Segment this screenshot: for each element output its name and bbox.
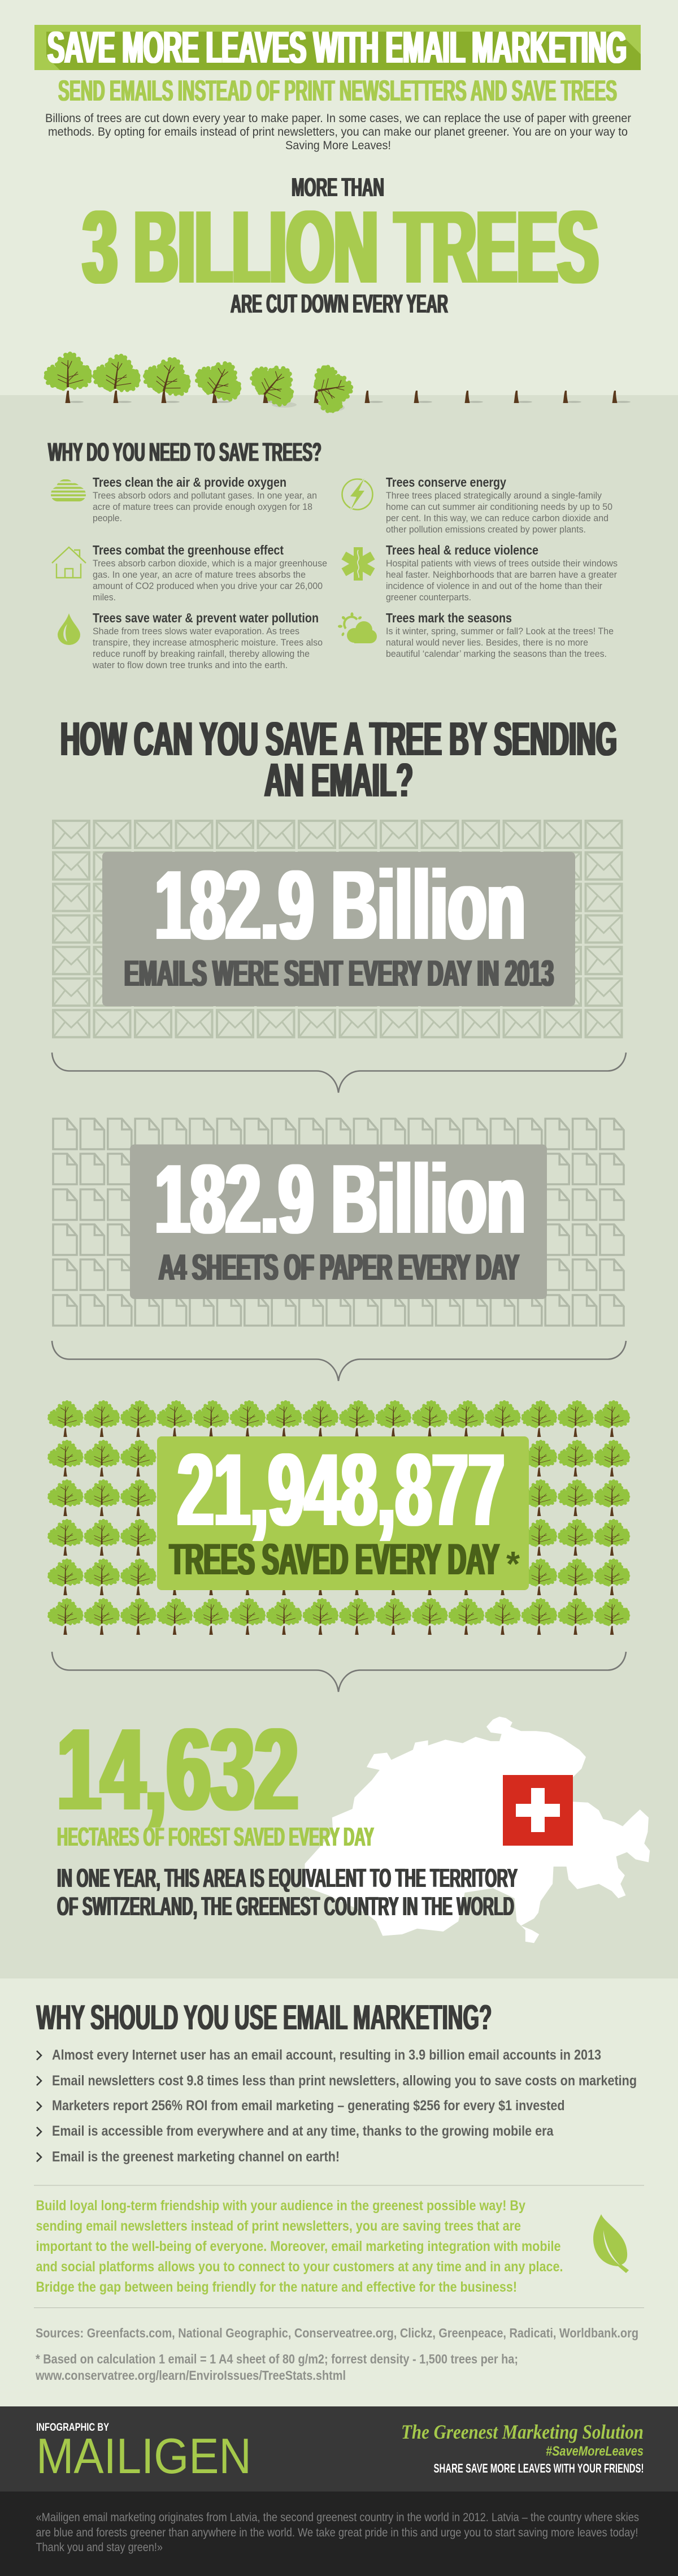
reason: heal and reduce violence: greener counterparts. xyxy=(386,592,471,603)
stat: 14,632: 14,632 xyxy=(57,1704,298,1834)
stat: more than: MORE THAN xyxy=(292,172,384,202)
heading: how can you save a tree: AN EMAIL? xyxy=(264,754,413,807)
footer: branding bar: #SaveMoreLeaves xyxy=(546,2444,644,2459)
reason: heal and reduce violence: incidence of violence in and out of the home than their xyxy=(386,581,602,591)
reason: conserve energy xyxy=(342,475,612,535)
stat: hectares of forest: HECTARES OF FOREST SAVED EVERY DAY xyxy=(57,1822,374,1851)
footer: branding bar: The Greenest Marketing Solution xyxy=(401,2421,644,2443)
reason: save water: Trees save water & prevent water pollution xyxy=(93,611,319,625)
text: green call to action: Bridge the gap between being friendly for the nature and effective for the business! xyxy=(36,2279,517,2295)
callout: emails sent every day xyxy=(102,850,575,1006)
reason: save water: water to flow down tree trunks and into the earth. xyxy=(92,660,288,670)
text: green call to action: important to the well-being of everyone. Moreover, email marketing integration with mobile xyxy=(36,2239,561,2254)
reason: greenhouse effect: gas. In one year, an acre of mature trees absorbs the xyxy=(93,570,306,580)
intro paragraph: Saving More Leaves! xyxy=(285,138,391,152)
intro paragraph xyxy=(45,111,631,152)
text: sources and notes xyxy=(35,2326,638,2383)
panel: reasons to save trees xyxy=(50,475,618,670)
pattern: paper sheet grid xyxy=(53,1119,624,1326)
list: reasons for email marketing: Email is the greenest marketing channel on earth! xyxy=(52,2149,340,2165)
icon: water drop xyxy=(58,613,80,645)
icon: medical star xyxy=(341,547,375,581)
list: reasons for email marketing: Almost every Internet user has an email account, resulting in 3.9 billion email accounts in 2013 xyxy=(52,2047,601,2063)
intro paragraph: methods. By opting for emails instead of print newsletters, you can make our planet greener. You are on your way to xyxy=(48,125,628,138)
reason: mark the seasons: beautiful ‘calendar’ marking the seasons than the trees. xyxy=(386,649,607,659)
arrow: brace three xyxy=(52,1652,626,1692)
reason: conserve energy: Three trees placed strategically around a single-family xyxy=(386,491,602,501)
background: lower light section xyxy=(0,1978,678,2406)
intro paragraph: Billions of trees are cut down every year to make paper. In some cases, we can replace the use of paper with greener xyxy=(45,111,631,125)
reason: clean the air: Trees clean the air & provide oxygen xyxy=(93,475,286,490)
list: reasons for email marketing xyxy=(37,2047,637,2165)
text: green call to action: sending email newsletters instead of print newsletters, you are saving trees that are xyxy=(36,2218,521,2234)
reason: clean the air xyxy=(50,475,317,523)
reason: save water xyxy=(58,611,323,670)
reason: mark the seasons xyxy=(338,611,614,659)
heading: why do you need to save trees: WHY DO YOU NEED TO SAVE TREES? xyxy=(48,438,321,467)
footer: branding bar: INFOGRAPHIC BY xyxy=(36,2421,109,2434)
illustration: row of trees falling into stumps xyxy=(44,350,631,415)
text: green call to action xyxy=(36,2198,563,2295)
icon: leaf xyxy=(593,2214,629,2273)
reason: conserve energy: other pollution emissions created by power plants. xyxy=(386,525,586,535)
footer: branding bar: MAILIGEN xyxy=(36,2428,251,2484)
reason: save water: reduce runoff by breaking rainfall, thereby allowing the xyxy=(93,649,310,659)
background: upper light band xyxy=(0,0,678,395)
list: reasons for email marketing: Email is accessible from everywhere and at any time, thanks to the growing mobile era xyxy=(52,2123,554,2139)
callout: trees saved every day xyxy=(157,1432,529,1590)
callout: A4 sheets of paper xyxy=(130,1144,547,1299)
reason: greenhouse effect: Trees combat the greenhouse effect xyxy=(93,543,284,557)
reason: conserve energy: home can cut summer air conditioning needs by up to 50 xyxy=(386,502,612,512)
reason: heal and reduce violence: Trees heal & reduce violence xyxy=(386,543,538,557)
list: reasons for email marketing: Marketers report 256% ROI from email marketing – generating $256 for every $1 invested xyxy=(52,2098,565,2114)
reason: clean the air: Trees absorb odors and pollutant gases. In one year, an xyxy=(93,491,317,501)
reason: mark the seasons: Is it winter, spring, summer or fall? Look at the trees! The xyxy=(386,626,614,637)
map: Switzerland xyxy=(305,1717,650,1943)
text: green call to action: and social platforms allows you to connect to your customers at any time and in any place. xyxy=(36,2259,563,2275)
icon: lightning bolt in circle xyxy=(342,478,373,510)
background: ground and main section xyxy=(0,395,678,1978)
reason: conserve energy: per cent. In this way, we can reduce carbon dioxide and xyxy=(386,513,609,523)
text: sources and notes: www.conservatree.org/learn/EnviroIssues/TreeStats.shtml xyxy=(35,2368,346,2383)
reason: mark the seasons: natural would never lies. Besides, there is no more xyxy=(386,638,588,648)
reason: mark the seasons: Trees mark the seasons xyxy=(386,611,512,625)
reason: heal and reduce violence: heal faster. Neighborhoods that are barren have a greater xyxy=(386,570,617,580)
arrow: brace two xyxy=(52,1341,626,1381)
footer: closing note xyxy=(0,2492,678,2576)
reason: heal and reduce violence xyxy=(341,543,618,603)
text: green call to action: Build loyal long-term friendship with your audience in the greenest possible way! By xyxy=(36,2198,525,2214)
footer: closing note: Thank you and stay green!» xyxy=(36,2541,163,2554)
reason: clean the air: people. xyxy=(93,513,122,523)
icon: striped cloud xyxy=(50,479,87,501)
stat: are cut down every year: ARE CUT DOWN EVERY YEAR xyxy=(231,289,448,318)
reason: conserve energy: Trees conserve energy xyxy=(386,475,506,490)
callout: trees saved every day: * xyxy=(506,1545,520,1584)
pattern: envelope grid xyxy=(53,821,621,1037)
reason: save water: transpire, they increase atmospheric moisture. Trees also xyxy=(93,638,323,648)
reason: heal and reduce violence: Hospital patients with views of trees outside their windows xyxy=(386,559,618,569)
icon: house xyxy=(52,547,86,578)
text: Switzerland comparison xyxy=(57,1863,518,1921)
reason: greenhouse effect: Trees absorb carbon dioxide, which is a major greenhouse xyxy=(93,559,327,569)
heading: how can you save a tree xyxy=(60,712,617,807)
callout: trees saved every day: 21,948,877 xyxy=(177,1432,505,1547)
reason: save water: Shade from trees slows water evaporation. As trees xyxy=(93,626,299,637)
reason: greenhouse effect: amount of CO2 produced when you drive your car 26,000 xyxy=(93,581,323,591)
reason: greenhouse effect: miles. xyxy=(93,592,116,603)
reason: clean the air: acre of mature trees can provide enough oxygen for 18 xyxy=(93,502,312,512)
reason: greenhouse effect xyxy=(52,543,327,603)
arrow: brace one xyxy=(52,1053,626,1093)
text: sources and notes: * Based on calculation 1 email = 1 A4 sheet of 80 g/m2; forrest density - 1,500 trees per ha; xyxy=(36,2352,518,2366)
icon: Swiss flag xyxy=(503,1775,573,1846)
footer: branding bar xyxy=(0,2406,678,2492)
icon: sun and cloud xyxy=(338,612,377,643)
pattern: tree grid xyxy=(47,1400,630,1635)
